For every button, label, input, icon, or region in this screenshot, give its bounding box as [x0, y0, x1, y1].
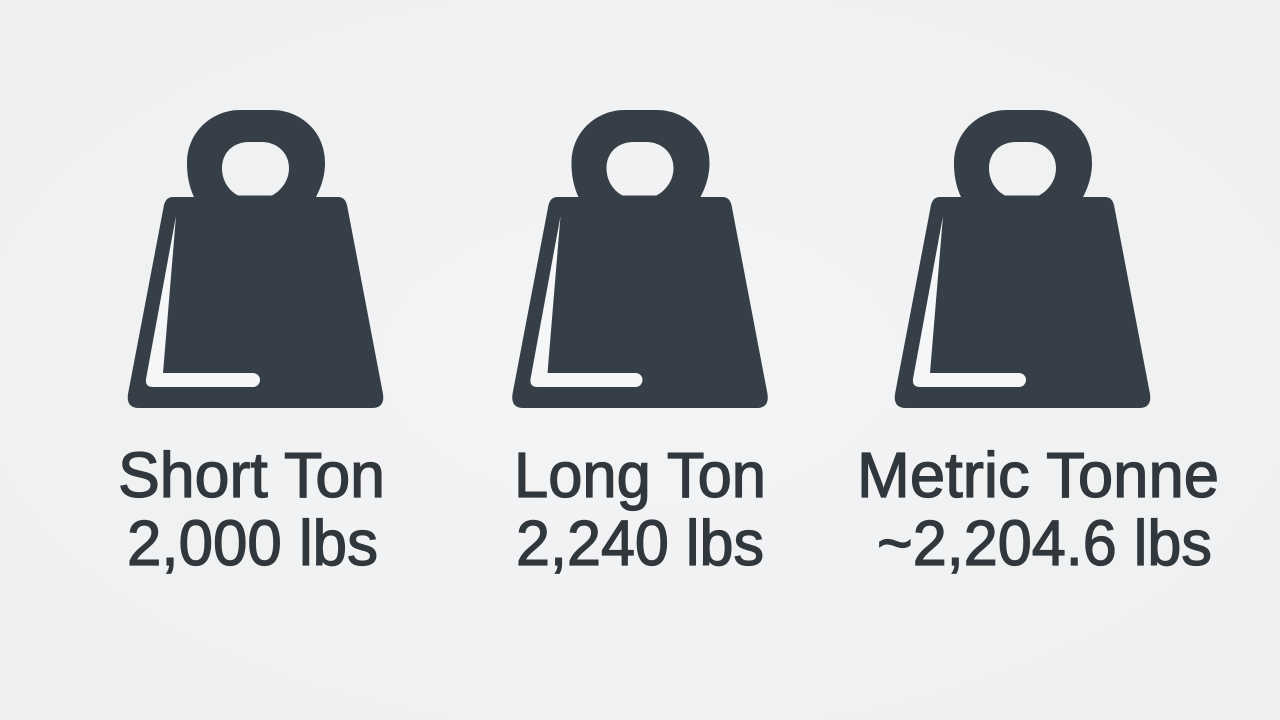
- panel: short ton: [118, 110, 385, 579]
- icon: short ton weight: [128, 110, 383, 408]
- value: 2,240 lbs: 2,240 lbs: [516, 507, 764, 579]
- label: long ton: Long Ton: [514, 439, 766, 511]
- value: ~2,204.6 lbs: ~2,204.6 lbs: [877, 507, 1212, 579]
- value: 2,000 lbs: 2,000 lbs: [127, 507, 378, 579]
- label: metric tonne: Metric Tonne: [857, 439, 1219, 511]
- label: short ton: Short Ton: [118, 439, 385, 511]
- icon: metric tonne weight: [895, 110, 1150, 408]
- icon: long ton weight: [512, 110, 768, 408]
- panel: metric tonne: [857, 110, 1219, 579]
- panel: long ton: [512, 110, 768, 579]
